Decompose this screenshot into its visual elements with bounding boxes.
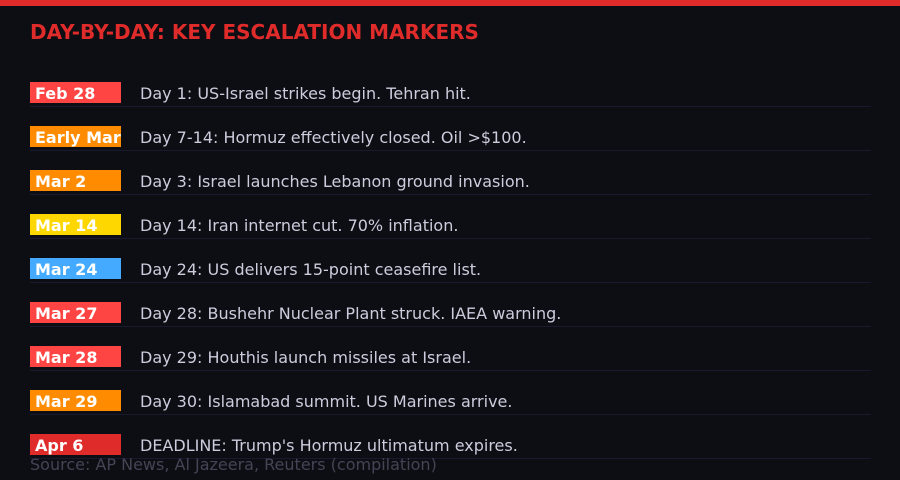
timeline row: Feb 28: Day 1: US-Israel strikes begin. Tehran hit. [140,84,471,103]
timeline row: Early Mar: Early Mar [35,128,121,147]
timeline row: Mar 14: Day 14: Iran internet cut. 70% inflation. [140,216,458,235]
timeline row: Mar 2 [30,170,871,195]
timeline row: Apr 6 [30,434,871,459]
timeline row: Mar 2: Day 3: Israel launches Lebanon ground invasion. [140,172,530,191]
timeline row: Mar 24: Day 24: US delivers 15-point ceasefire list. [140,260,481,279]
top accent bar [0,0,900,6]
timeline row: Mar 29: Mar 29 [35,392,97,411]
timeline row: Mar 27: Day 28: Bushehr Nuclear Plant struck. IAEA warning. [140,304,561,323]
timeline row: Mar 24: Mar 24 [35,260,97,279]
timeline row: Mar 29 [30,390,871,415]
timeline row: Early Mar: Day 7-14: Hormuz effectively closed. Oil >$100. [140,128,527,147]
timeline row: Mar 14 [30,214,871,239]
timeline row: Early Mar [30,126,871,151]
timeline row: Apr 6: Apr 6 [35,436,83,455]
timeline row: Mar 24 [30,258,871,283]
timeline row: Mar 27 [30,302,871,327]
timeline row: Feb 28 [30,82,871,107]
timeline row: Mar 14: Mar 14 [35,216,97,235]
timeline row: Mar 27: Mar 27 [35,304,97,323]
timeline row: Mar 28: Mar 28 [35,348,97,367]
timeline row: Mar 28 [30,346,871,371]
timeline row: Mar 2: Mar 2 [35,172,86,191]
source note: Source: AP News, Al Jazeera, Reuters (compilation) [30,455,437,474]
timeline row: Mar 29: Day 30: Islamabad summit. US Marines arrive. [140,392,512,411]
title: DAY-BY-DAY: KEY ESCALATION MARKERS [30,20,479,44]
timeline row: Apr 6: DEADLINE: Trump's Hormuz ultimatum expires. [140,436,518,455]
timeline row: Feb 28: Feb 28 [35,84,95,103]
timeline row: Mar 28: Day 29: Houthis launch missiles at Israel. [140,348,471,367]
